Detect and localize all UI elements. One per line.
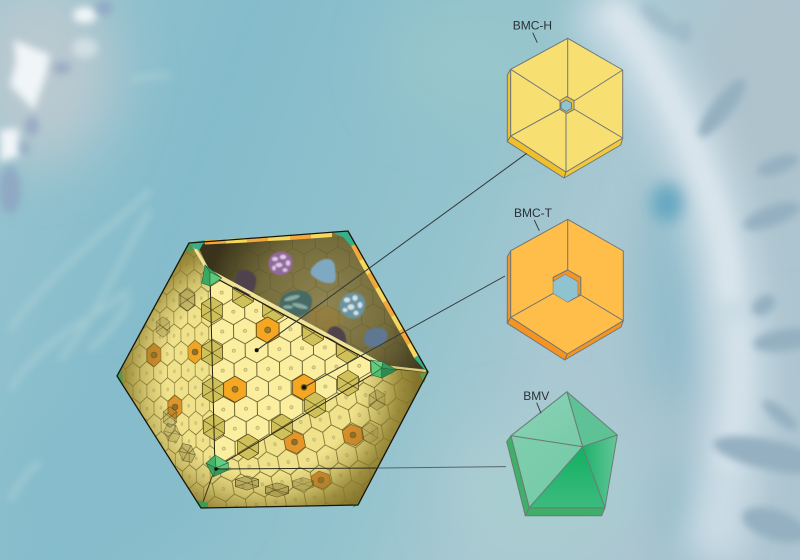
- edge folded hexagons on cut side: [232, 282, 358, 363]
- cargo: purple enzyme: [269, 252, 293, 275]
- label: BMC-T: [514, 206, 553, 231]
- rim: green corner pieces: [117, 231, 428, 508]
- label: BMC-H: BMC-H: [513, 18, 552, 32]
- BMC-H central pore: [560, 96, 574, 114]
- front face: intact hexagon lattice: [210, 280, 372, 461]
- dark slashes on the right: [636, 0, 800, 550]
- shell outline: [117, 231, 428, 508]
- cargo: dark purple enzyme: [235, 270, 256, 298]
- BMC-H hexamer: [507, 38, 623, 178]
- BMV pentamer at upper vertex: [202, 265, 222, 286]
- label: BMC-T: BMC-T: [514, 206, 553, 220]
- pale streaks and white flecks on the left: [10, 75, 170, 500]
- rim: top edge stripes: [205, 232, 332, 244]
- BMC-T hexagons in the lattice: [224, 317, 315, 402]
- BMV pentamer at lower vertex: [206, 455, 228, 477]
- shell: outer rim shading: [117, 231, 428, 508]
- cargo: teal enzyme: [280, 290, 312, 316]
- shell: left face hexagons: [122, 252, 214, 502]
- shell: lower face hexagons: [207, 370, 414, 507]
- leader line: BMC-H: [255, 153, 527, 352]
- edge folded hexagons across face edges: [202, 297, 358, 460]
- label: BMV: BMV: [523, 389, 549, 403]
- cargo: blue enzyme: [311, 259, 336, 283]
- label: BMC-H: [513, 18, 552, 43]
- cut edge rim: [194, 247, 426, 371]
- cargo: pale blue enzyme: [340, 293, 365, 319]
- leader line: BMV: [214, 467, 506, 471]
- leader line: BMC-T: [302, 276, 505, 389]
- cargo: dark purple enzyme 2: [326, 326, 347, 344]
- rim: right edge stripes: [351, 243, 419, 358]
- BMV pentamer at right vertex: [371, 360, 397, 378]
- icosahedral microcompartment shell: [116, 230, 429, 509]
- BMC-T central pore: [553, 270, 581, 302]
- BMC-T hexamer: [507, 219, 623, 360]
- shell: base body: [117, 231, 428, 508]
- label: BMV: [523, 389, 549, 413]
- cavity: inside of the cut-open shell: [197, 236, 424, 369]
- cargo: slate enzyme: [364, 328, 387, 347]
- BMV pentamer: [507, 392, 617, 516]
